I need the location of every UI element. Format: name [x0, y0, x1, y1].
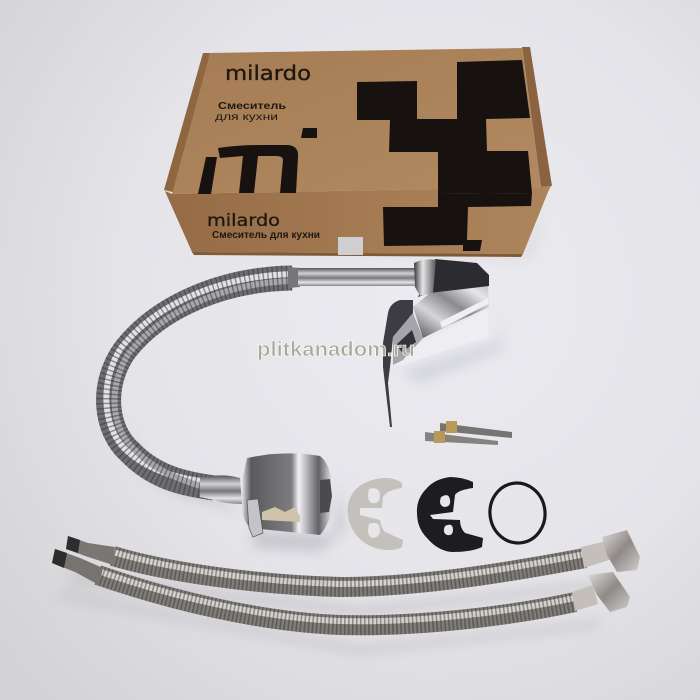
- dark top cap: [418, 259, 489, 297]
- white reflective plate: [393, 310, 488, 365]
- black rubber gasket: [417, 477, 483, 552]
- faucet shank pipe: [288, 267, 416, 288]
- box top text: Смеситель: [218, 100, 287, 112]
- metal washer plate: [348, 478, 403, 550]
- nozzle: [320, 479, 332, 513]
- spout body: [413, 286, 489, 338]
- box top face: [172, 48, 541, 194]
- box front text: [207, 211, 320, 241]
- box top text: для кухни: [215, 111, 278, 123]
- lever: [383, 300, 413, 427]
- reflection: [262, 507, 300, 522]
- box bottom edge: [192, 252, 523, 257]
- flexible metal hose: [106, 274, 292, 490]
- chrome interior: [393, 313, 423, 365]
- soft shadows: [60, 200, 600, 655]
- box front text: milardo: [207, 211, 280, 231]
- box top text: milardo: [225, 61, 311, 85]
- left fitting: [66, 536, 115, 565]
- right fitting: [572, 585, 598, 611]
- mounting studs: [425, 421, 512, 445]
- right fitting: [581, 541, 612, 568]
- barcode sticker: [338, 237, 363, 255]
- neck: [200, 475, 242, 504]
- logo: big m: [198, 128, 317, 194]
- cardboard box: [164, 47, 552, 257]
- hex nut: [588, 572, 630, 612]
- box front face: [165, 186, 551, 254]
- chrome collar: [414, 259, 436, 296]
- braided hose: lower: [52, 549, 630, 625]
- black pixel pattern: top: [357, 60, 532, 194]
- box front text: Смеситель для кухни: [212, 230, 320, 241]
- side button: [247, 499, 263, 537]
- left fitting: [52, 549, 103, 585]
- watermark: plitkanadom.ru: [257, 339, 415, 361]
- faucet body with lever: [383, 259, 489, 427]
- pull-out spray head: [200, 453, 332, 537]
- box flaps: [164, 47, 552, 193]
- braided hose: upper: [66, 530, 640, 587]
- chrome head: [242, 453, 332, 535]
- black pixel pattern: front: [383, 193, 532, 251]
- hex nut: [602, 530, 640, 572]
- rubber o-ring: [486, 479, 549, 547]
- box top text: [215, 61, 311, 123]
